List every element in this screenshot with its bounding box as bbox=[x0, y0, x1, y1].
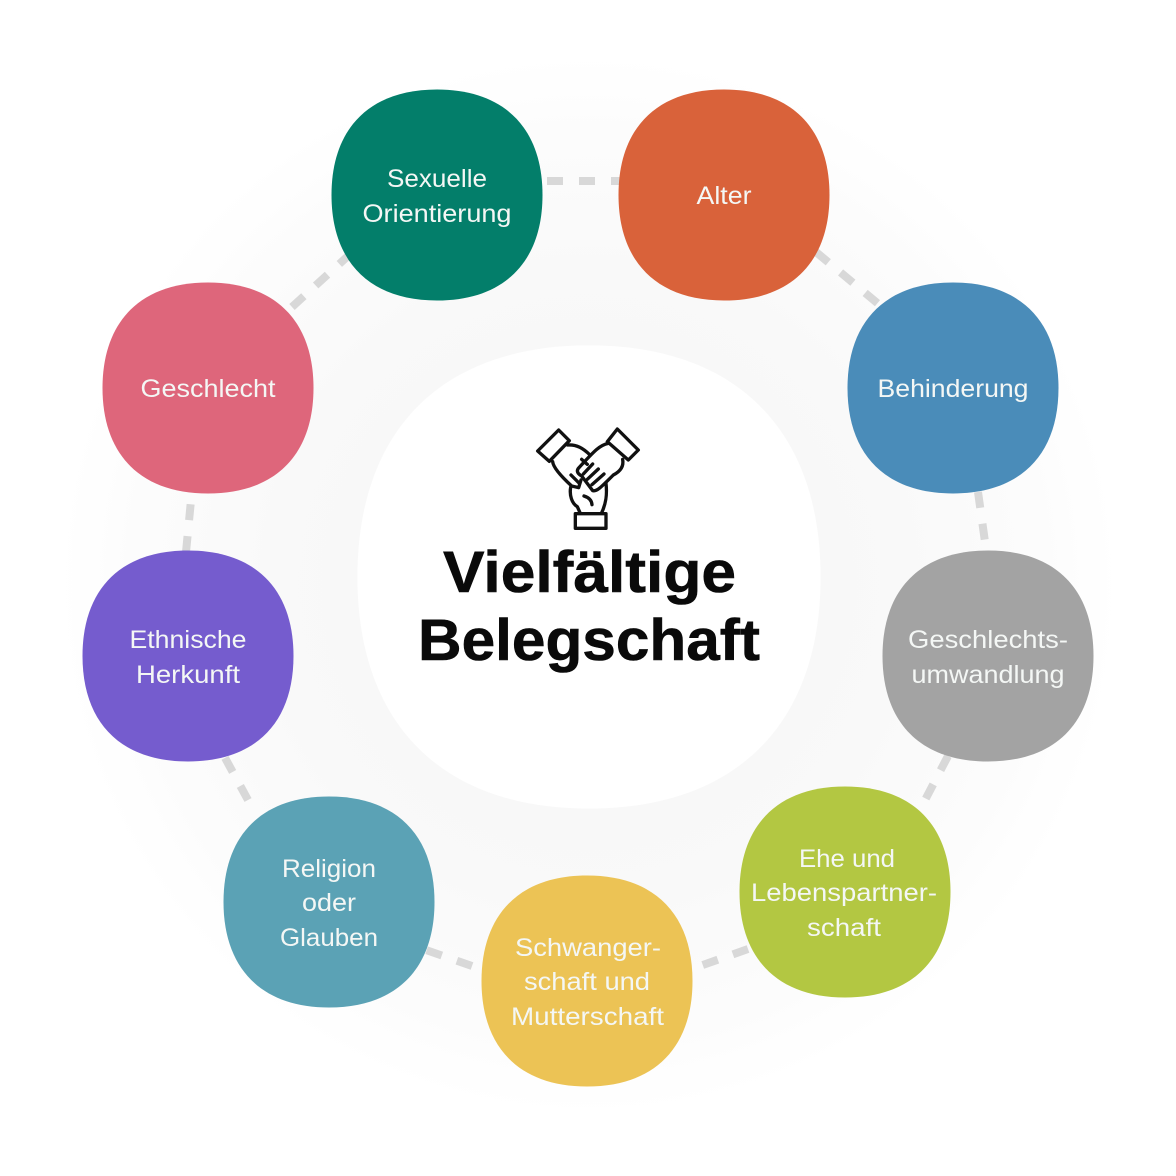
icon: joined hands bbox=[538, 429, 638, 528]
panel: Ethnische Herkunft: Ethnische bbox=[130, 626, 246, 654]
panel: Religion oder Glauben: Religion bbox=[282, 855, 376, 883]
panel: Geschlecht bbox=[102, 282, 314, 494]
panel: Schwangerschaft und Mutterschaft: schaft und bbox=[524, 968, 650, 996]
title: Belegschaft bbox=[418, 608, 760, 673]
panel: Schwangerschaft und Mutterschaft: Schwanger- bbox=[515, 934, 661, 962]
panel: Geschlecht: Geschlecht bbox=[140, 375, 276, 403]
panel: Ehe und Lebenspartnerschaft: Ehe und bbox=[799, 845, 895, 873]
panel: Behinderung bbox=[848, 282, 1058, 494]
title: Vielfältige bbox=[443, 540, 736, 605]
panel: Sexuelle Orientierung: Sexuelle bbox=[387, 165, 487, 193]
panel: Schwangerschaft und Mutterschaft bbox=[482, 876, 692, 1086]
panel: Ethnische Herkunft bbox=[82, 550, 294, 762]
panel: Religion oder Glauben bbox=[224, 796, 434, 1008]
panel: Ehe und Lebenspartnerschaft: schaft bbox=[807, 914, 881, 942]
panel: Geschlechtsumwandlung bbox=[882, 550, 1094, 762]
panel: Alter: Alter bbox=[696, 182, 752, 210]
panel: Geschlechtsumwandlung: umwandlung bbox=[912, 661, 1064, 689]
dashed connector ring bbox=[186, 181, 987, 966]
panel: Sexuelle Orientierung bbox=[332, 90, 542, 300]
panel: Schwangerschaft und Mutterschaft: Mutterschaft bbox=[511, 1003, 664, 1031]
panel: Ehe und Lebenspartnerschaft: Lebenspartner- bbox=[751, 879, 937, 907]
title bbox=[418, 540, 760, 673]
panel: Ethnische Herkunft: Herkunft bbox=[136, 661, 240, 689]
panel: Religion oder Glauben: Glauben bbox=[280, 924, 378, 952]
panel: Alter bbox=[618, 90, 830, 300]
panel: Geschlechtsumwandlung: Geschlechts- bbox=[908, 626, 1068, 654]
panel: Behinderung: Behinderung bbox=[878, 375, 1028, 403]
center panel bbox=[357, 345, 821, 809]
panel: Religion oder Glauben: oder bbox=[302, 889, 356, 917]
panel: Sexuelle Orientierung: Orientierung bbox=[362, 200, 512, 228]
panel: Ehe und Lebenspartnerschaft bbox=[740, 786, 950, 998]
